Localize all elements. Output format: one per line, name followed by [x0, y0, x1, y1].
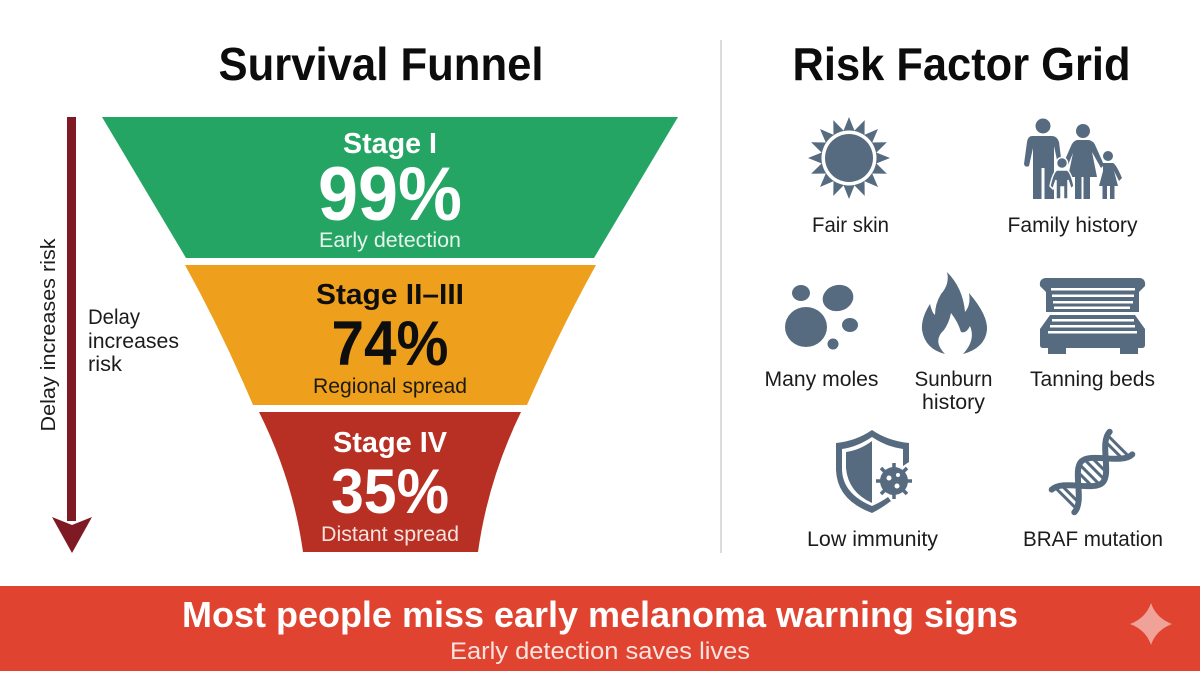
funnel panel: Stage II-III: [185, 265, 596, 405]
label: BRAF mutation: BRAF mutation: [1023, 528, 1163, 551]
funnel panel: Stage I: 99%: [318, 152, 462, 237]
funnel panel: Stage I: [102, 117, 678, 258]
funnel panel: Stage II-III: Stage II–III: [316, 279, 464, 311]
title: Risk Factor Grid: Risk Factor Grid: [792, 38, 1130, 90]
arrow: delay increases risk: [52, 117, 92, 553]
icon: sparkle: [1130, 603, 1172, 645]
icon: moles: [785, 281, 858, 350]
funnel panel: Stage IV: 35%: [331, 457, 449, 527]
icon: sun (fair skin): [808, 117, 890, 199]
icon: DNA helix: [1052, 432, 1132, 512]
side note: delay increases risk: [88, 306, 179, 376]
label: Fair skin: Fair skin: [812, 214, 889, 237]
label: Tanning beds: Tanning beds: [1030, 368, 1155, 391]
funnel panel: Stage II-III: 74%: [332, 309, 448, 379]
funnel panel: Stage IV: Stage IV: [333, 427, 448, 459]
label: Sunburn history: [914, 368, 992, 414]
label: Low immunity: Low immunity: [807, 528, 939, 551]
banner: [0, 586, 1200, 671]
funnel panel: Stage IV: [259, 412, 521, 552]
banner headline: Most people miss early melanoma warning signs: [182, 594, 1018, 635]
funnel panel: Stage IV: Distant spread: [321, 523, 459, 546]
funnel panel: Stage II-III: Regional spread: [313, 375, 467, 398]
side note: delay increases risk: increases: [88, 330, 179, 353]
icon: tanning bed: [1040, 278, 1145, 354]
side note: delay increases risk: risk: [88, 353, 123, 376]
title: Survival Funnel: Survival Funnel: [218, 38, 544, 90]
rotated arrow label: Delay increases risk: [38, 237, 60, 431]
label: Sunburn history: Sunburn: [914, 368, 992, 391]
icon: family: [1024, 118, 1122, 199]
label: Many moles: Many moles: [764, 368, 878, 391]
icon: shield with virus: [836, 430, 912, 513]
label: Family history: Family history: [1008, 214, 1138, 237]
icon: flame: [922, 272, 987, 354]
funnel panel: Stage I: Early detection: [319, 229, 461, 252]
funnel panel: Stage I: Stage I: [343, 128, 437, 160]
banner subline: Early detection saves lives: [450, 638, 750, 665]
label: Sunburn history: history: [922, 391, 986, 414]
side note: delay increases risk: Delay: [88, 306, 140, 329]
